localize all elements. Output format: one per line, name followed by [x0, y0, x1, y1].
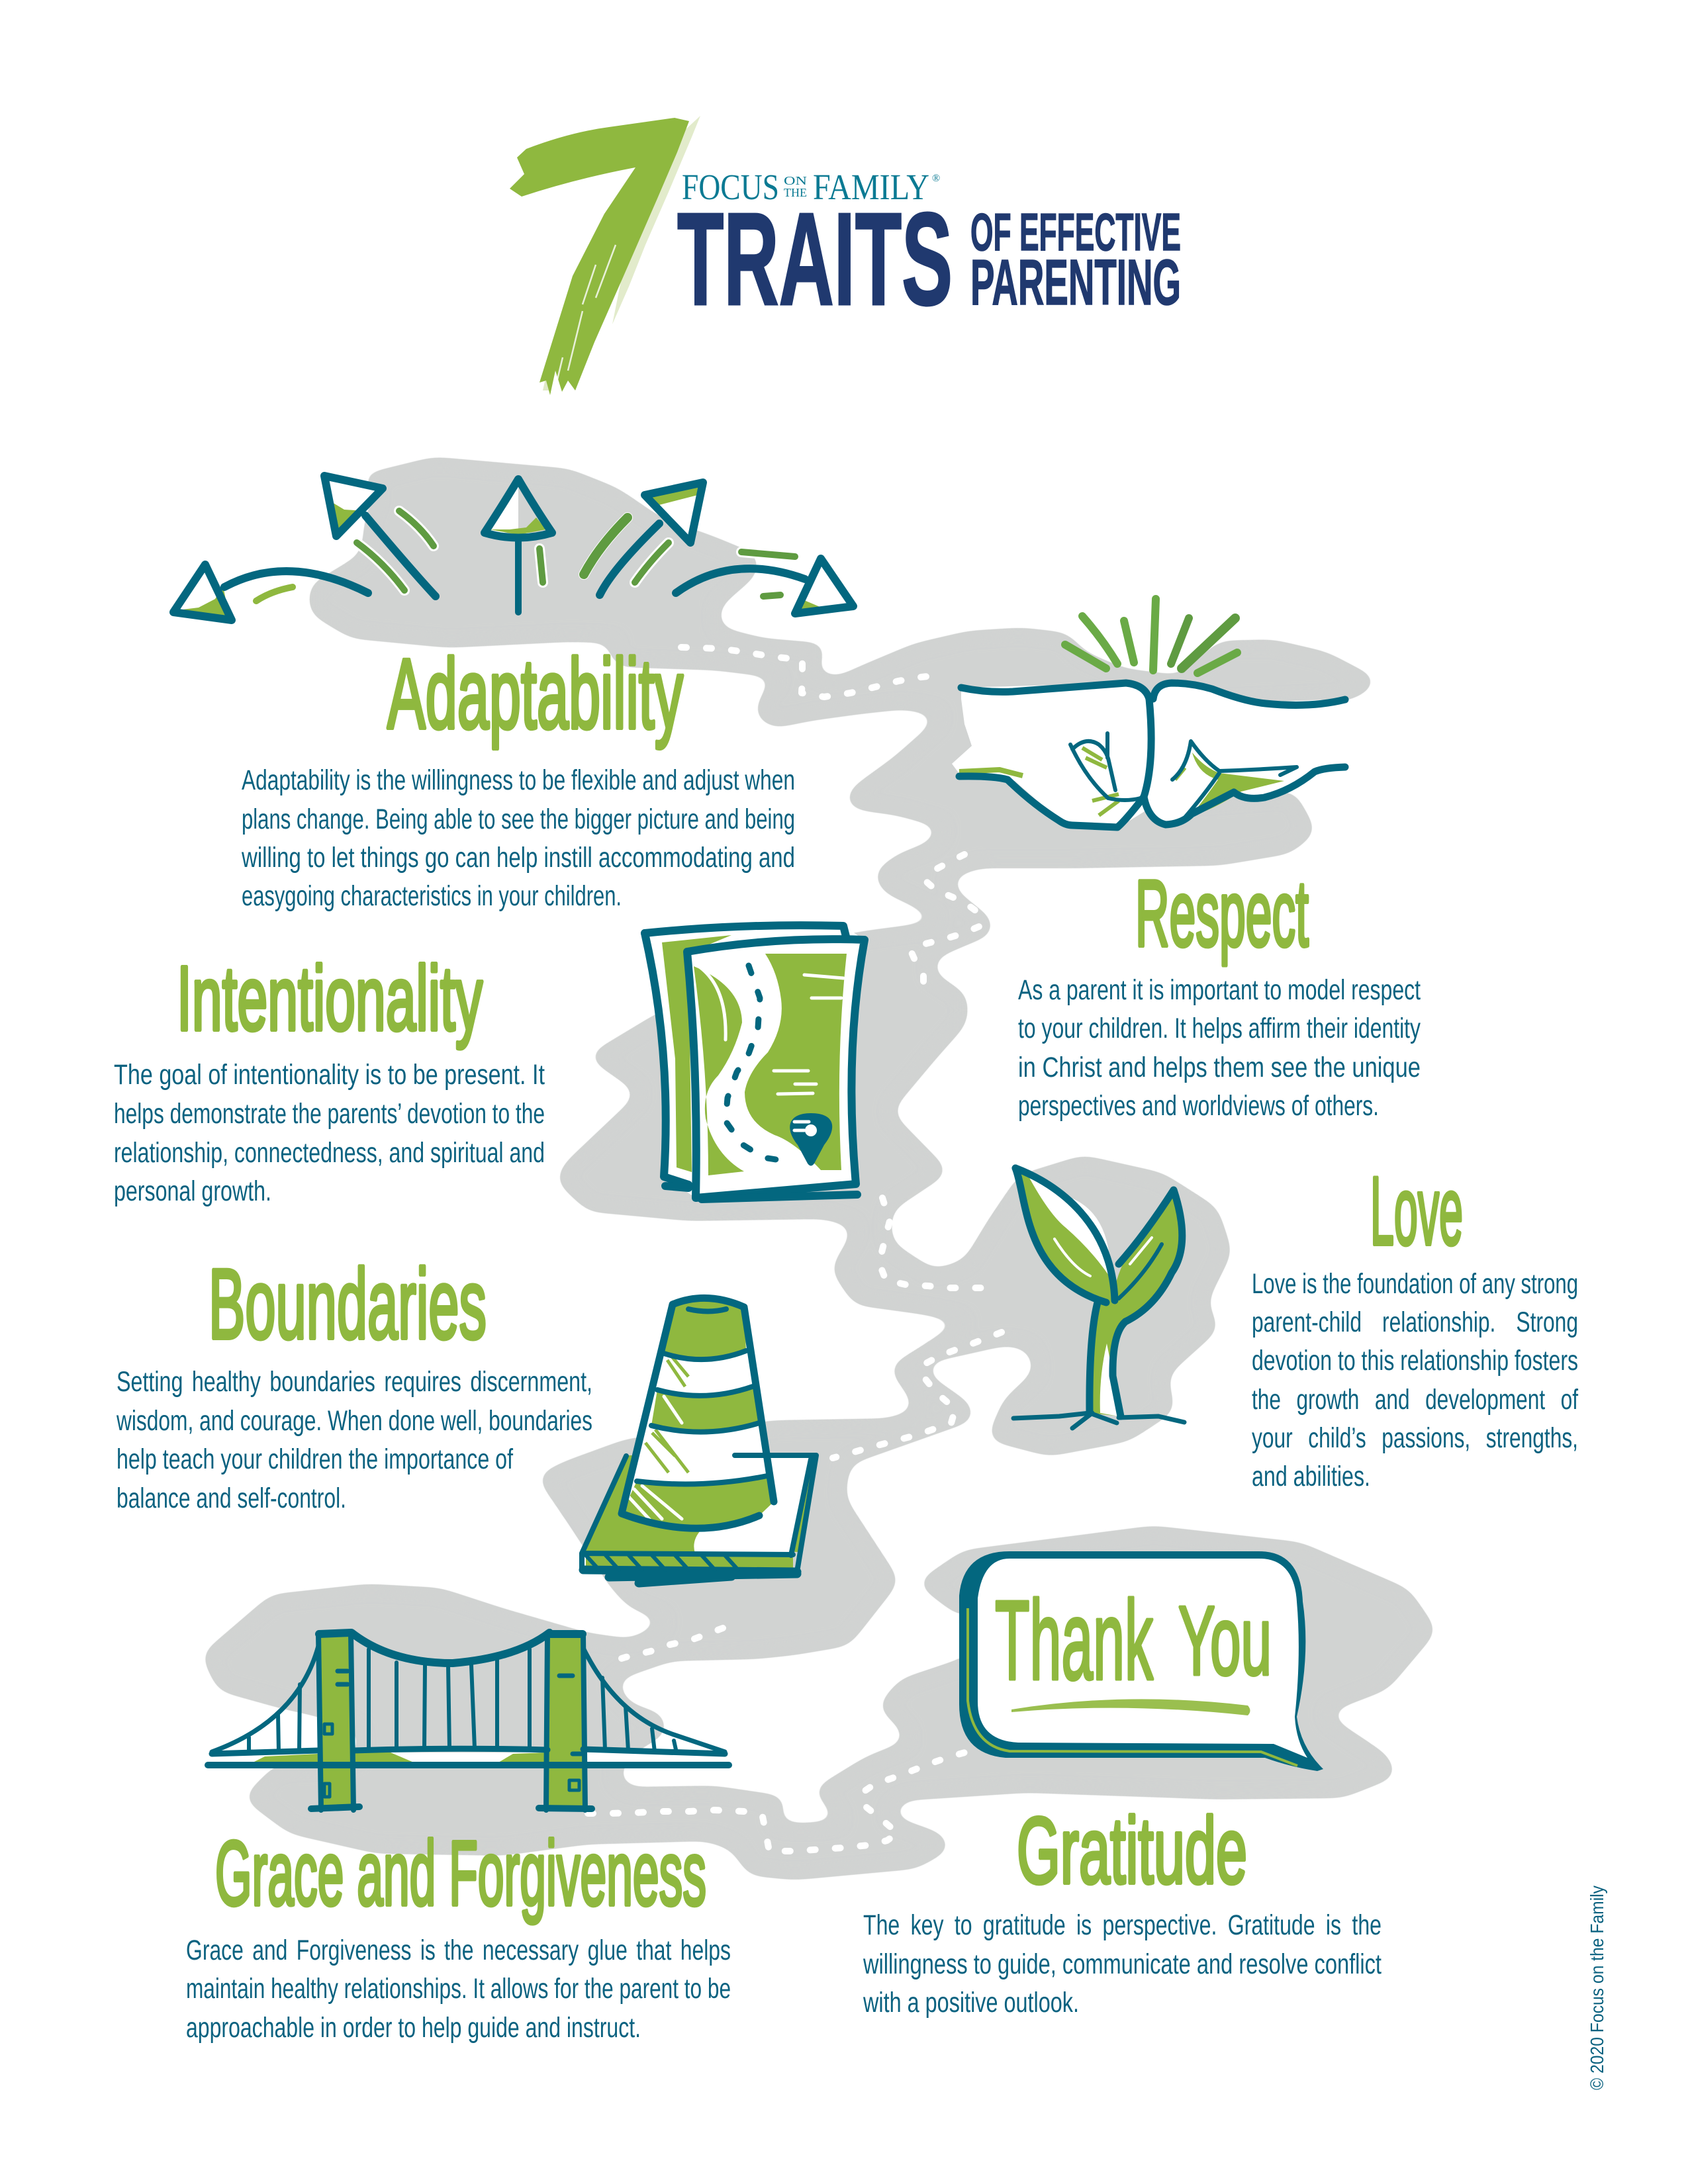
icon: folded map — [645, 925, 865, 1199]
icon: adaptability arrows — [173, 476, 853, 620]
title: OF EFFECTIVE — [970, 203, 1181, 261]
logo: Focus on the Family: ® — [932, 173, 940, 184]
heading and text: intentionality: personal growth. — [114, 1175, 271, 1207]
icon: thank you speech bubble: Thank — [995, 1578, 1154, 1704]
dashed road centre line — [588, 647, 1002, 1851]
heading and text: adaptability: plans change. Being able to see the bigger picture and being — [242, 803, 795, 835]
heading and text: gratitude: with a positive outlook. — [863, 1987, 1079, 2019]
icon: sprout — [1013, 1168, 1184, 1428]
icon: traffic cone — [582, 1298, 816, 1583]
heading and text: adaptability: willing to let things go can help instill accommodating and — [241, 842, 795, 874]
big brush number 7 — [510, 116, 700, 395]
heading and text: adaptability: Adaptability — [387, 638, 683, 749]
heading and text: gratitude — [863, 1798, 1382, 2019]
logo: Focus on the Family: FOCUS — [682, 167, 779, 207]
heading and text: intentionality: Intentionality — [177, 948, 483, 1050]
heading and text: respect: Respect — [1135, 861, 1309, 966]
heading and text: grace and forgiveness — [186, 1823, 731, 2044]
logo: Focus on the Family: THE — [784, 186, 807, 199]
gray winding road background — [201, 457, 1438, 1880]
heading and text: intentionality — [114, 948, 545, 1207]
heading and text: adaptability: Adaptability is the willingness to be flexible and adjust when — [242, 764, 795, 796]
heading and text: love: parent-child relationship. Strong — [1252, 1306, 1578, 1338]
heading and text: love: Love — [1370, 1157, 1463, 1265]
heading and text: respect — [1018, 861, 1421, 1122]
copyright: © 2020 Focus on the Family — [1587, 1886, 1607, 2090]
heading and text: adaptability — [241, 638, 795, 912]
heading and text: boundaries: help teach your children the importance of — [117, 1443, 514, 1475]
icon: suspension bridge — [208, 1633, 729, 1810]
heading and text: adaptability: easygoing characteristics in your children. — [242, 880, 622, 912]
heading and text: grace and forgiveness: maintain healthy relationships. It allows for the parent to be — [186, 1973, 731, 2005]
heading and text: respect: in Christ and helps them see the unique — [1018, 1052, 1421, 1083]
logo: Focus on the Family: ON — [784, 174, 807, 187]
logo: Focus on the Family — [682, 167, 940, 207]
heading and text: boundaries: Boundaries — [209, 1248, 487, 1359]
heading and text: gratitude: willingness to guide, communicate and resolve conflict — [863, 1948, 1382, 1980]
heading and text: love: your child’s passions, strengths, — [1252, 1422, 1578, 1454]
heading and text: respect: perspectives and worldviews of others. — [1018, 1090, 1379, 1122]
icon: thank you speech bubble: You — [1178, 1586, 1272, 1696]
heading and text: gratitude: Gratitude — [1017, 1798, 1247, 1903]
title: PARENTING — [970, 246, 1181, 318]
heading and text: intentionality: The goal of intentionality is to be present. It — [114, 1059, 545, 1091]
heading and text: intentionality: helps demonstrate the parents’ devotion to the — [114, 1098, 545, 1130]
heading and text: love: devotion to this relationship fosters — [1252, 1345, 1578, 1377]
heading and text: boundaries: Setting healthy boundaries requires discernment, — [117, 1366, 592, 1398]
heading and text: love: and abilities. — [1252, 1461, 1370, 1492]
heading and text: respect: to your children. It helps affirm their identity — [1018, 1013, 1421, 1044]
heading and text: love — [1252, 1157, 1579, 1492]
title: TRAITS — [677, 186, 953, 333]
heading and text: gratitude: The key to gratitude is perspective. Gratitude is the — [863, 1909, 1382, 1941]
heading and text: love: the growth and development of — [1252, 1384, 1579, 1416]
icon: fist bump — [952, 599, 1345, 827]
icon: thank you speech bubble — [959, 1551, 1323, 1771]
heading and text: boundaries: balance and self-control. — [117, 1482, 346, 1514]
heading and text: intentionality: relationship, connectedness, and spiritual and — [114, 1137, 545, 1169]
heading and text: respect: As a parent it is important to model respect — [1018, 974, 1421, 1006]
heading and text: boundaries — [116, 1248, 592, 1514]
heading and text: grace and forgiveness: Grace and Forgiveness — [215, 1823, 706, 1925]
logo: Focus on the Family: FAMILY — [813, 167, 929, 207]
heading and text: grace and forgiveness: approachable in order to help guide and instruct. — [186, 2012, 641, 2044]
heading and text: grace and forgiveness: Grace and Forgiveness is the necessary glue that helps — [186, 1934, 731, 1966]
heading and text: boundaries: wisdom, and courage. When done well, boundaries — [116, 1405, 592, 1437]
